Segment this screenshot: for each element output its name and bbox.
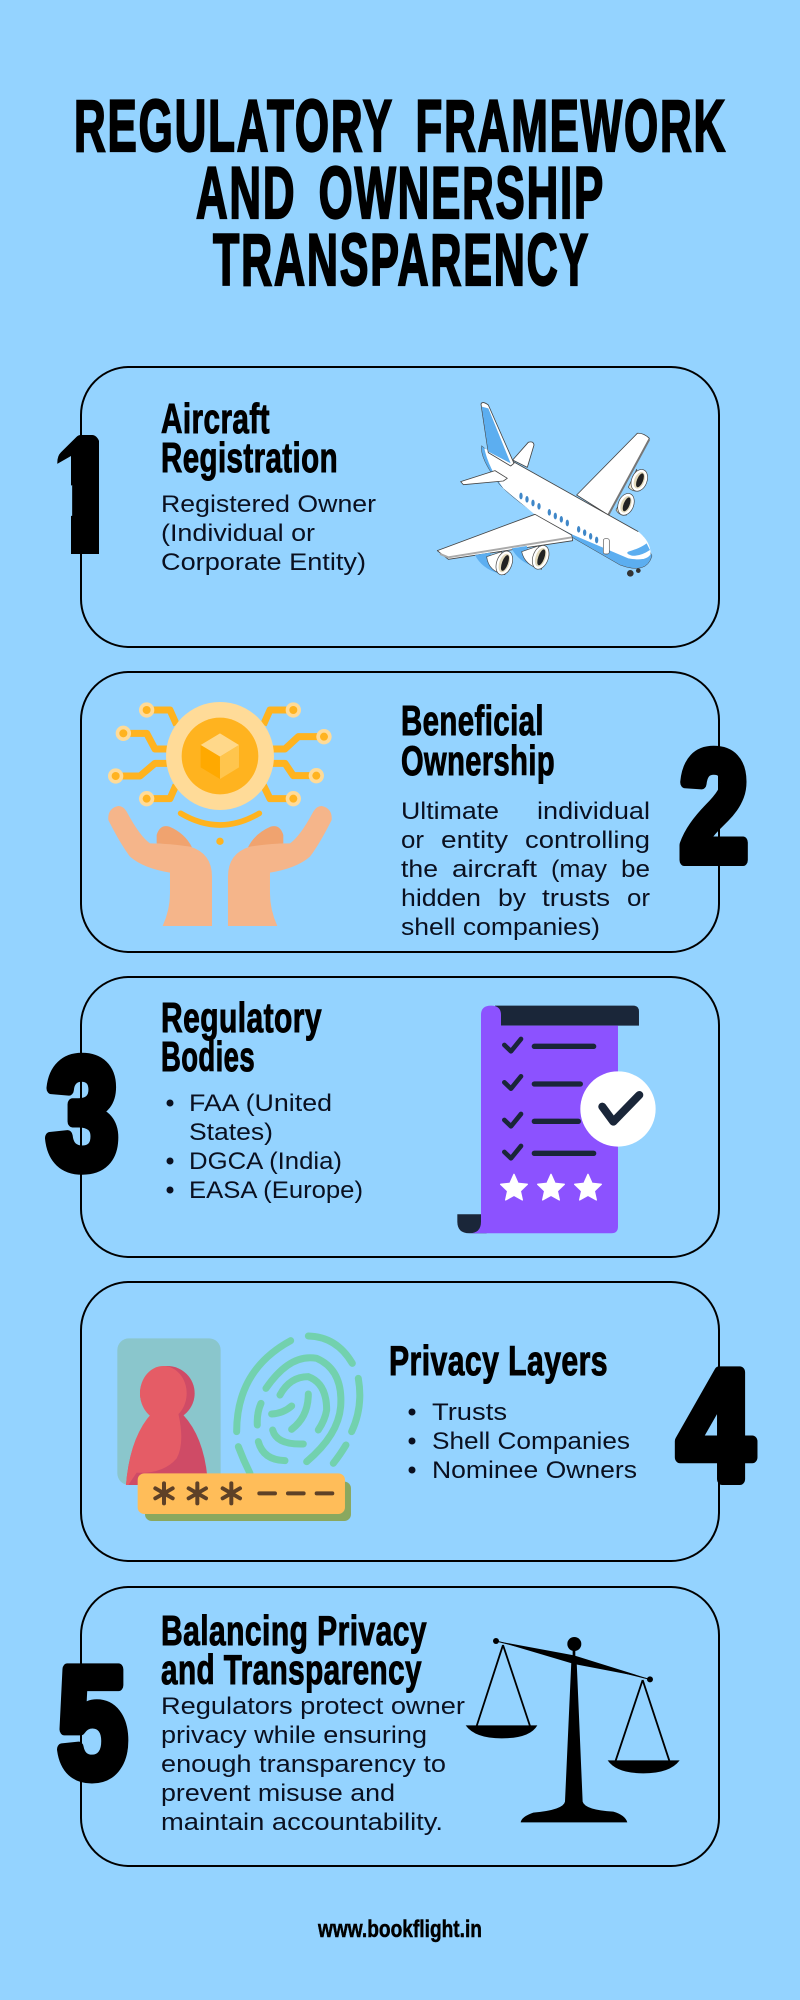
- number 3: 3: [47, 1027, 118, 1200]
- text: ultimate individual: trusts: [542, 885, 610, 912]
- fuselage: [484, 448, 651, 559]
- list: privacy layers: [408, 1399, 637, 1484]
- list: regulators: EASA (Europe): [189, 1177, 363, 1204]
- landing gear: [627, 570, 634, 577]
- panel: regulatory bodies: [47, 977, 719, 1257]
- text: registered owner: Registered Owner: [161, 491, 376, 518]
- icon: hands holding chip: [108, 702, 332, 926]
- list: regulators: States): [189, 1119, 273, 1146]
- heading: beneficial ownership: Beneficial: [401, 697, 544, 744]
- heading: regulatory bodies: [161, 994, 322, 1080]
- list: regulators: DGCA (India): [189, 1148, 342, 1175]
- number 1: 1: [59, 418, 109, 572]
- heading: balancing privacy and transparency: [161, 1607, 427, 1693]
- list: regulators: FAA (United: [189, 1090, 332, 1117]
- text: ultimate individual: by: [498, 885, 526, 912]
- panel: privacy layers: [81, 1282, 753, 1561]
- heading: regulatory bodies: Regulatory: [161, 994, 322, 1041]
- panel: aircraft registration: [59, 367, 719, 647]
- text: regulators protect: [161, 1693, 465, 1836]
- text: ultimate individual: the: [401, 856, 438, 883]
- near stabilizer: [461, 471, 507, 485]
- footer url: www.bookflight.in: [317, 1916, 482, 1943]
- text: ultimate individual: (may: [551, 856, 607, 883]
- icon: checklist: [457, 1006, 656, 1233]
- far engines: [628, 469, 640, 491]
- tail fin: [481, 403, 514, 466]
- text: ultimate individual: [401, 798, 650, 941]
- heading: aircraft registration: Registration: [161, 434, 338, 481]
- text: ultimate individual: or: [627, 885, 650, 912]
- heading: privacy layers: Privacy Layers: [389, 1337, 608, 1384]
- text: ultimate individual: controlling: [525, 827, 650, 854]
- number 2: 2: [680, 720, 748, 893]
- far wing: [577, 433, 649, 515]
- icon: balance scale: [466, 1637, 680, 1822]
- windows: [519, 493, 598, 543]
- heading: balancing privacy and transparency: and Transparency: [161, 1646, 422, 1693]
- text: regulators protect: maintain accountability.: [161, 1809, 443, 1836]
- door: [603, 539, 609, 554]
- heading: aircraft registration: [161, 395, 338, 481]
- near wing: [437, 514, 573, 559]
- heading: beneficial ownership: [401, 697, 555, 784]
- blue belly: [481, 446, 652, 568]
- heading: balancing privacy and transparency: Balancing Privacy: [161, 1607, 427, 1654]
- text: registered owner: [161, 491, 376, 576]
- list: privacy layers: Shell Companies: [432, 1428, 630, 1455]
- text: regulators protect: prevent misuse and: [161, 1780, 395, 1807]
- near engines: [475, 553, 498, 573]
- text: ultimate individual: aircraft: [452, 856, 537, 883]
- icon: identity and fingerprint: [117, 1336, 360, 1521]
- text: regulators protect: Regulators protect owner: [161, 1693, 465, 1720]
- list: privacy layers: Trusts: [432, 1399, 507, 1426]
- text: registered owner: Corporate Entity): [161, 549, 366, 576]
- text: regulators protect: enough transparency to: [161, 1751, 446, 1778]
- text: regulators protect: privacy while ensuring: [161, 1722, 427, 1749]
- panel: balancing privacy and transparency: [58, 1587, 719, 1866]
- far stabilizer: [513, 442, 534, 467]
- text: ultimate individual: individual: [537, 798, 650, 825]
- text: ultimate individual: entity: [441, 827, 508, 854]
- text: registered owner: (Individual or: [161, 520, 315, 547]
- heading: regulatory bodies: Bodies: [161, 1033, 255, 1080]
- text: ultimate individual: be: [621, 856, 650, 883]
- title: [74, 86, 727, 301]
- cockpit: [627, 543, 650, 556]
- icon: airplane: [437, 403, 652, 577]
- list: regulators: [166, 1090, 363, 1204]
- text: ultimate individual: shell companies): [401, 914, 600, 941]
- number 5: 5: [58, 1636, 127, 1809]
- list: privacy layers: Nominee Owners: [432, 1457, 637, 1484]
- heading: beneficial ownership: Ownership: [401, 737, 555, 784]
- heading: aircraft registration: Aircraft: [161, 395, 270, 442]
- text: ultimate individual: or: [401, 827, 424, 854]
- text: ultimate individual: hidden: [401, 885, 481, 912]
- panel: beneficial ownership: [81, 672, 748, 952]
- text: ultimate individual: Ultimate: [401, 798, 499, 825]
- number 4: 4: [678, 1339, 753, 1512]
